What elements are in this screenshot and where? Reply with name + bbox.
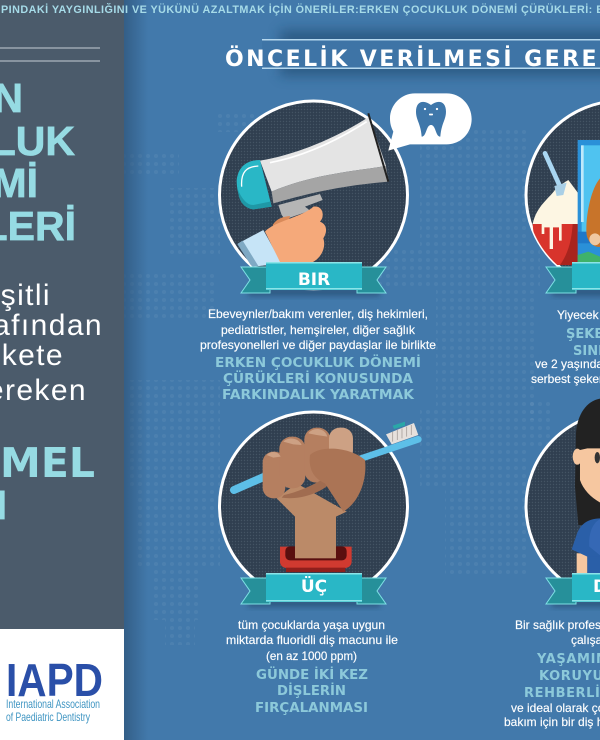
text: card three description: (en az 1000 ppm) <box>266 649 357 663</box>
icon: health professional in circle <box>526 398 600 600</box>
text: card three description: tüm çocuklarda yaşa uygun <box>238 618 385 632</box>
panel text <box>0 279 103 407</box>
logo: IAPD <box>0 629 124 740</box>
panel emphasis <box>0 439 95 528</box>
logo: IAPD: of Paediatric Dentistry <box>6 710 90 724</box>
text: card one highlight: FARKINDALIK YARATMAK <box>222 388 415 403</box>
ribbon: ÜÇ <box>241 573 386 607</box>
ribbon: ÜÇ: ÜÇ <box>301 575 327 597</box>
panel heading <box>0 75 76 249</box>
left panel <box>0 0 124 740</box>
ribbon: DÖRT <box>546 573 600 607</box>
text: card one description: pediatristler, hemşireler, diğer sağlık <box>221 323 416 337</box>
text: card three description: miktarda fluoridli diş macunu ile <box>226 633 398 647</box>
ribbon: İKİ <box>546 262 600 296</box>
panel: card two <box>526 101 600 386</box>
text: card one description: profesyonelleri ve diğer paydaşlar ile birlikte <box>200 338 436 352</box>
text: card two description <box>531 308 600 386</box>
icon: megaphone in circle <box>220 101 408 289</box>
ribbon: BIR: BIR <box>298 270 330 290</box>
text: card four description <box>504 618 600 729</box>
panel: card four <box>504 398 600 729</box>
text: card one highlight: ÇÜRÜKLERİ KONUSUNDA <box>223 371 413 387</box>
text: card three highlight: FIRÇALANMASI <box>255 701 368 716</box>
panel: card three <box>220 412 418 716</box>
ribbon: BIR <box>241 262 386 296</box>
icon: ice cream and cereal box in circle <box>524 102 600 266</box>
text: card three highlight: GÜNDE İKİ KEZ <box>256 667 368 683</box>
logo: IAPD: IAPD <box>6 654 103 706</box>
logo: IAPD: International Association <box>6 697 100 711</box>
panel: card one <box>200 93 472 403</box>
text: card three highlight: DİŞLERİN <box>277 683 346 699</box>
text: card one highlight <box>215 355 421 403</box>
icon: fist holding toothbrush in circle <box>220 412 418 600</box>
text: card three highlight <box>255 667 368 716</box>
top strip text: PINDAKİ YAYGINLIĞINI VE YÜKÜNÜ AZALTMAK İÇİN ÖNERİLER:ERKEN ÇOCUKLUK DÖNEMİ ÇÜRÜKLERİ: B <box>1 3 600 16</box>
icon: speech bubble with tooth <box>388 93 472 151</box>
title band <box>225 30 600 76</box>
background: left panel shadow <box>124 0 148 740</box>
text: card one description <box>200 307 436 352</box>
text: card one description: Ebeveynler/bakım verenler, diş hekimleri, <box>208 307 428 321</box>
background: dotted world map <box>124 114 550 645</box>
text: card three description <box>226 618 398 663</box>
text: card one highlight: ERKEN ÇOCUKLUK DÖNEMİ <box>215 355 421 371</box>
